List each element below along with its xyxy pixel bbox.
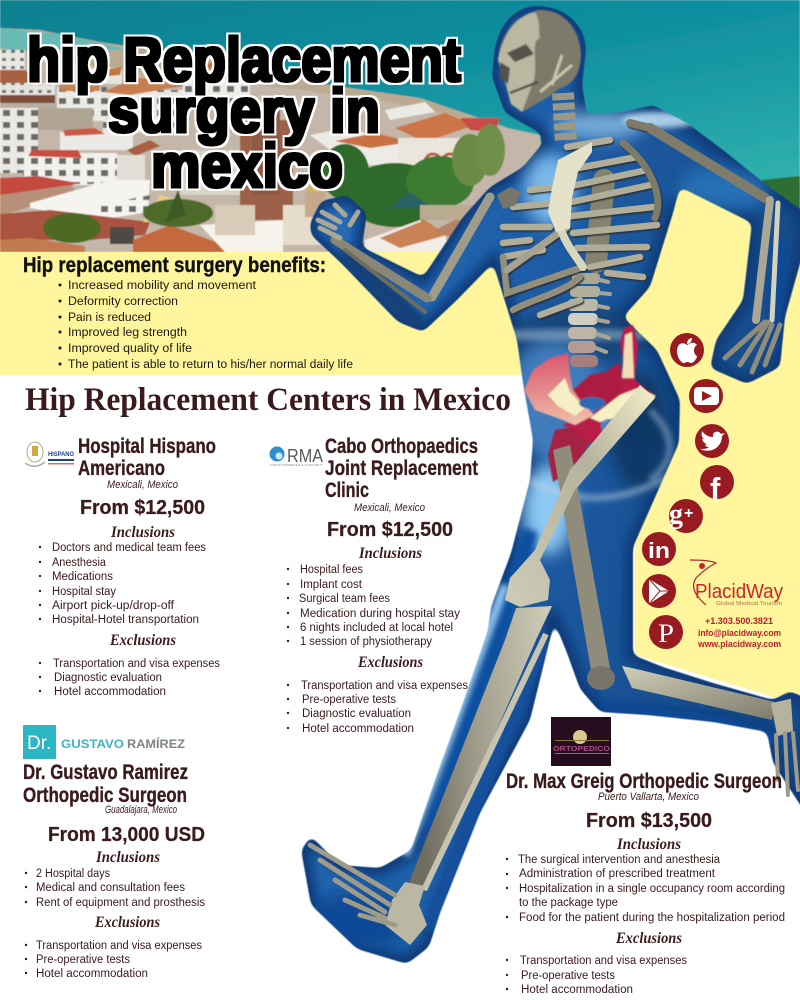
logo: RMA <box>270 446 323 467</box>
logo: Hospital Hispano: HISPANO <box>48 452 74 458</box>
section heading: Hip Replacement Centers in Mexico <box>25 382 511 418</box>
arm bones <box>318 128 780 372</box>
inclusions: Medical and consultation fees <box>36 882 185 894</box>
panel: Dr. Gustavo Ramirez <box>23 725 205 980</box>
price: From $12,500 <box>327 519 453 541</box>
inclusions <box>287 545 460 648</box>
inclusions: Inclusions <box>110 524 175 541</box>
logo: Hospital Hispano <box>25 442 74 466</box>
title: surgery in <box>108 77 380 146</box>
contact details: info@placidway.com <box>698 628 781 638</box>
icon: facebook <box>700 465 734 506</box>
heading: Cabo Orthopaedics <box>325 435 478 458</box>
exclusions <box>287 654 468 735</box>
contact details: +1.303.500.3821 <box>705 616 773 626</box>
inclusions: Administration of prescribed treatment <box>519 868 716 880</box>
inclusions: Inclusions <box>358 545 422 562</box>
icon: google plus: + <box>684 505 693 522</box>
exclusions: Pre-operative tests <box>36 954 130 966</box>
inclusions: Hospital-Hotel transportation <box>52 614 199 626</box>
inclusions: Hospital fees <box>300 564 363 576</box>
inclusions: Anesthesia <box>52 557 107 569</box>
title: hip Replacement <box>27 26 461 95</box>
inclusions <box>39 524 206 626</box>
icon: google plus: g <box>669 499 683 530</box>
exclusions <box>25 914 202 980</box>
exclusions: Transportation and visa expenses <box>520 955 687 967</box>
icon: linkedin <box>642 532 676 566</box>
pelvis <box>524 325 656 482</box>
inclusions: Inclusions <box>95 849 160 866</box>
inclusions: 2 Hospital days <box>36 868 110 880</box>
panel: Cabo Orthopaedics: Clinic <box>325 479 369 502</box>
exclusions: Exclusions <box>109 632 176 649</box>
inclusions: 1 session of physiotherapy <box>300 636 432 648</box>
sternum <box>548 142 592 232</box>
logo: RMA: ORTOPEDIA LUXURY <box>270 463 323 467</box>
panel: Dr. Gustavo Ramirez: Orthopedic Surgeon <box>23 784 187 807</box>
inclusions: Airport pick-up/drop-off <box>52 600 175 612</box>
heading: Dr. Gustavo Ramirez <box>23 761 188 784</box>
body silhouette with shading <box>280 0 800 980</box>
icon: youtube <box>689 379 723 413</box>
social icons <box>642 333 734 649</box>
exclusions: Pre-operative tests <box>521 970 615 982</box>
panel: Dr. Max Greig <box>506 717 785 996</box>
title <box>27 26 461 201</box>
PlacidWay logo and contact <box>690 560 783 649</box>
icon: google plus <box>669 499 703 533</box>
skull <box>498 10 581 112</box>
inclusions: Medications <box>52 571 113 583</box>
human body with skeleton <box>280 0 800 980</box>
price: From 13,000 USD <box>48 824 205 846</box>
benefits list: The patient is able to return to his/her normal daily life <box>68 359 353 371</box>
contact details: www.placidway.com <box>697 639 781 649</box>
inclusions: 6 nights included at local hotel <box>300 622 453 634</box>
inclusions: Hospital stay <box>52 586 116 598</box>
photo: seaside town of Puerto Vallarta <box>0 0 800 252</box>
inclusions: Food for the patient during the hospitalization period <box>519 912 785 924</box>
panel: Cabo Orthopaedics: Mexicali, Mexico <box>354 502 425 514</box>
inclusions <box>25 849 205 909</box>
panel: Dr. Gustavo Ramirez: Guadalajara, Mexico <box>105 804 177 816</box>
inclusions: Medication during hospital stay <box>300 608 460 620</box>
benefits list: Pain is reduced <box>68 312 151 324</box>
exclusions: Hotel accommodation <box>54 686 166 698</box>
exclusions: Diagnostic evaluation <box>302 708 411 720</box>
icon: twitter <box>695 424 729 458</box>
panel: Hospital Hispano Americano: Americano <box>78 457 165 480</box>
panel: Cabo Orthopaedics: Joint Replacement <box>325 457 478 480</box>
logo: Centro Ortopedico <box>551 717 611 766</box>
logo: Dr. Gustavo Ramirez: GUSTAVO <box>61 737 124 751</box>
benefits heading: Hip replacement surgery benefits: <box>23 254 326 277</box>
icon: pinterest: P <box>658 619 674 648</box>
exclusions: Transportation and visa expenses <box>301 680 468 692</box>
panel: Cabo Orthopaedics <box>270 435 478 735</box>
exclusions: Transportation and visa expenses <box>53 658 220 670</box>
logo: Centro Ortopedico: ORTOPEDICO <box>553 746 611 753</box>
icon: apple <box>670 333 704 367</box>
rib cage <box>503 123 658 315</box>
inclusions: Implant cost <box>300 579 363 591</box>
panel: Dr. Max Greig: Puerto Vallarta, Mexico <box>598 791 699 803</box>
price: From $13,500 <box>586 810 712 832</box>
exclusions: Exclusions <box>615 930 682 947</box>
benefits list: Improved quality of life <box>68 343 192 355</box>
price: From $12,500 <box>80 497 205 519</box>
exclusions <box>506 930 687 996</box>
inclusions: Inclusions <box>616 836 681 853</box>
leg bones <box>310 385 798 945</box>
title: mexico <box>151 132 343 201</box>
inclusions: Doctors and medical team fees <box>52 542 206 554</box>
exclusions <box>39 632 220 698</box>
benefits list: Deformity correction <box>68 296 178 308</box>
exclusions: Exclusions <box>94 914 160 931</box>
icon: linkedin: in <box>648 538 670 563</box>
panel: benefits <box>23 254 353 371</box>
inclusions: to the package type <box>519 897 618 909</box>
exclusions: Exclusions <box>357 654 423 671</box>
inclusions: Rent of equipment and prosthesis <box>36 897 205 909</box>
logo mark <box>690 560 783 607</box>
inclusions <box>506 836 785 924</box>
shoulder joint <box>497 187 521 209</box>
benefits list: Improved leg strength <box>68 327 187 339</box>
panel: Hospital Hispano Americano: Mexicali, Mexico <box>107 479 178 491</box>
logo: Dr. Gustavo Ramirez: Dr. <box>27 733 51 754</box>
logo mark: Global Medical Tourism <box>716 601 782 607</box>
exclusions: Hotel accommodation <box>521 984 633 996</box>
icon: pinterest <box>649 615 683 649</box>
panel: Hospital Hispano Americano <box>25 435 220 698</box>
logo: Dr. Gustavo Ramirez <box>23 725 185 759</box>
inclusions: Hospitalization in a single occupancy room according <box>519 883 785 895</box>
logo mark: PlacidWay <box>695 581 783 603</box>
contact details <box>697 616 781 649</box>
exclusions: Hotel accommodation <box>36 968 148 980</box>
spine <box>563 93 610 367</box>
icon: facebook: f <box>710 471 721 506</box>
heading: Hospital Hispano <box>78 435 216 458</box>
logo: Dr. Gustavo Ramirez: RAMÍREZ <box>127 736 185 751</box>
icon: google play <box>642 574 676 608</box>
exclusions: Hotel accommodation <box>302 723 414 735</box>
inclusions: The surgical intervention and anesthesia <box>518 854 721 866</box>
exclusions: Transportation and visa expenses <box>36 940 202 952</box>
benefits list: Increased mobility and movement <box>68 280 257 292</box>
benefits list <box>58 280 353 371</box>
logo: RMA: RMA <box>287 446 323 466</box>
exclusions: Pre-operative tests <box>302 694 396 706</box>
exclusions: Diagnostic evaluation <box>54 672 162 684</box>
inclusions: Surgical team fees <box>299 593 390 605</box>
